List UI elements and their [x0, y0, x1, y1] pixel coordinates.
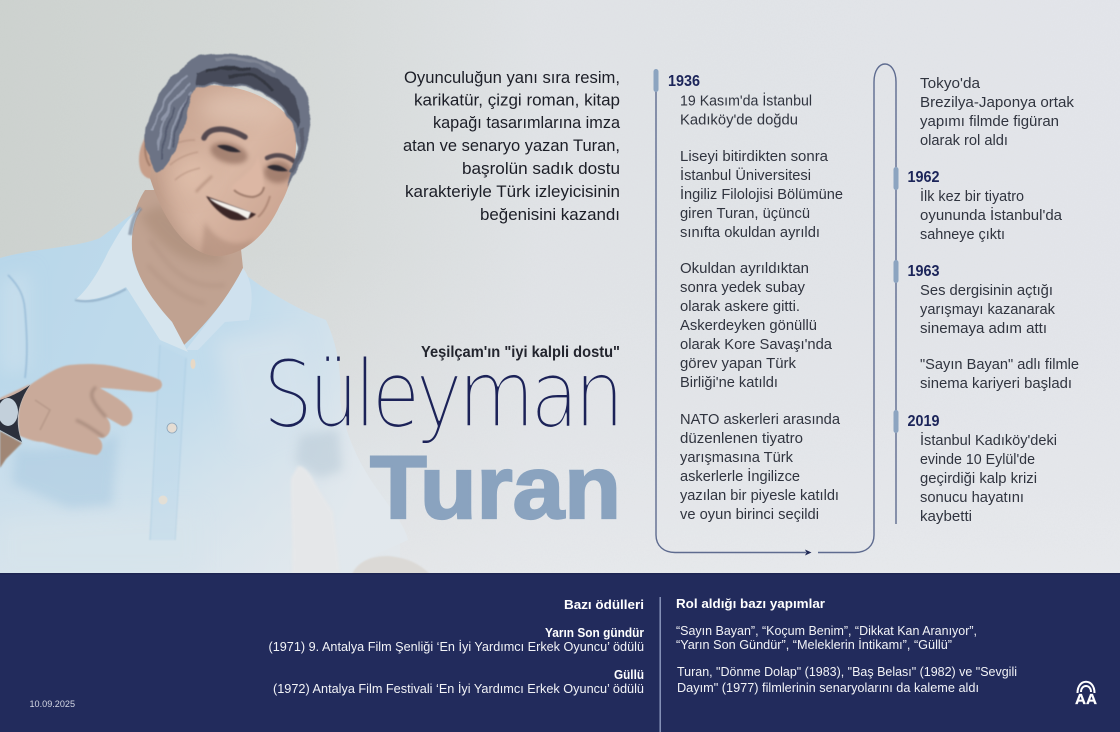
forearm [352, 556, 430, 574]
armpit gap [292, 466, 320, 532]
left collar [75, 208, 188, 352]
face [150, 85, 296, 255]
timeline markers [654, 69, 898, 433]
timeline entry: Tokyo continuation [920, 76, 1075, 149]
intro paragraph [403, 69, 621, 224]
timeline entry: 1936: NATO askerleri arasında [680, 412, 841, 428]
timeline entry: 1936: sınıfta okuldan ayrıldı [680, 225, 820, 241]
panel divider [660, 597, 661, 732]
intro paragraph: başrolün sadık dostu [462, 160, 620, 178]
eyes [217, 145, 241, 152]
teeth [209, 198, 251, 219]
right collar [186, 268, 252, 350]
wristwatch [0, 385, 30, 442]
timeline entry: 1936: İngiliz Filolojisi Bölümüne [680, 185, 843, 203]
filmography block: Turan, "Dönme Dolap" (1983), "Baş Belası" (1982) ve "Sevgili [677, 664, 1017, 679]
timeline entry: 1936: olarak Kore Savaşı'nda [680, 337, 833, 353]
timeline entry: 2019: 2019 [908, 413, 940, 430]
mouth [206, 196, 256, 220]
timeline entry: 1962: oyununda İstanbul'da [920, 206, 1063, 224]
timeline entry: 1936: 1936 [668, 73, 700, 90]
timeline entry: 2019: sonucu hayatını [920, 490, 1024, 506]
timeline entry: 1936: yarışmasına Türk [680, 450, 794, 466]
timeline entry: Tokyo continuation: olarak rol aldı [920, 133, 1008, 149]
timeline entry: 1936: Askerdeyken gönüllü [680, 318, 817, 334]
sleeve seam [8, 275, 27, 378]
timeline entry: 1962 [908, 169, 1063, 243]
title: surname: Turan [370, 437, 621, 537]
wrist [0, 431, 22, 468]
tagline: Yeşilçam'ın "iyi kalpli dostu" [421, 344, 620, 361]
timeline entry: 1963: sinema kariyeri başladı [920, 376, 1072, 392]
timeline entry: 2019: İstanbul Kadıköy'deki [920, 431, 1057, 449]
timeline entry: Tokyo continuation: Tokyo'da [920, 76, 981, 92]
awards block: Yarın Son gündür [545, 625, 644, 640]
timeline entry: 1936: olarak askere gitti. [680, 299, 800, 315]
shirt fabric shading [4, 281, 280, 402]
filmography block: “Sayın Bayan”, “Koçum Benim”, “Dikkat Kan Aranıyor”, [676, 623, 977, 638]
intro paragraph: beğenisini kazandı [480, 206, 620, 224]
awards block: Bazı ödülleri [564, 597, 644, 612]
wrist skin above watch [0, 384, 30, 400]
bottom panel [0, 573, 1120, 732]
timeline entry: 1936: yazılan bir piyesle katıldı [680, 488, 839, 504]
timeline entry: 1936: askerlerle İngilizce [680, 467, 800, 485]
timeline entry: 2019: geçirdiği kalp krizi [920, 471, 1037, 487]
timeline entry: 2019: kaybetti [920, 509, 972, 525]
intro paragraph: atan ve senaryo yazan Turan, [403, 137, 620, 155]
title: first name: Süleyman [263, 341, 620, 448]
timeline entry: Tokyo continuation: Brezilya-Japonya ortak [920, 95, 1075, 111]
timeline entry: 1962: İlk kez bir tiyatro [920, 187, 1024, 205]
awards block: (1971) 9. Antalya Film Şenliği ‘En İyi Yardımcı Erkek Oyuncu’ ödülü [268, 639, 644, 654]
timeline entry: 1963: yarışmayı kazanarak [920, 302, 1056, 318]
intro paragraph: Oyunculuğun yanı sıra resim, [404, 69, 620, 87]
timeline entry: 1963: 1963 [908, 263, 940, 280]
shirt [0, 208, 408, 574]
filmography block: “Yarın Son Gündür”, “Meleklerin İntikamı”, “Güllü” [676, 637, 952, 652]
timeline entry: 1936: düzenlenen tiyatro [680, 431, 803, 447]
timeline entry: 1936: Liseyi bitirdikten sonra [680, 149, 829, 165]
pocket [12, 433, 118, 508]
intro paragraph: karakteriyle Türk izleyicisinin [405, 183, 620, 201]
timeline entry: 1936: Kadıköy'de doğdu [680, 112, 798, 128]
ear [138, 138, 152, 180]
timeline entry: 1936 [668, 73, 843, 523]
timeline entry: 2019: evinde 10 Eylül'de [920, 452, 1035, 468]
hair [145, 54, 312, 188]
nose [247, 171, 262, 194]
buttons [158, 359, 196, 504]
timeline connector line [656, 64, 896, 552]
filmography block: Rol aldığı bazı yapımlar [676, 596, 825, 611]
awards block [268, 597, 644, 696]
timeline entry: 1963 [908, 263, 1079, 392]
awards block: Güllü [614, 667, 644, 682]
icon: AA agency logo [1075, 682, 1097, 708]
timeline entry: 1962: sahneye çıktı [920, 227, 1005, 243]
sleeve shadow [295, 430, 342, 478]
portrait photo of Süleyman Turan [0, 54, 430, 574]
timeline entry: 1962: 1962 [908, 169, 940, 186]
eyebrows [204, 129, 245, 138]
timeline entry: 2019 [908, 413, 1057, 525]
intro paragraph: karikatür, çizgi roman, kitap [414, 92, 620, 110]
timeline entry: 1936: sonra yedek subay [680, 280, 806, 296]
timeline arrowhead [805, 550, 812, 556]
timeline entry: 1936: Birliği'ne katıldı [680, 375, 778, 391]
timeline entry: 1963: Ses dergisinin açtığı [920, 283, 1053, 299]
filmography block: Dayım" (1977) filmlerinin senaryolarını da kaleme aldı [677, 680, 979, 695]
timeline entry: 1936: giren Turan, üçüncü [680, 206, 810, 222]
timeline entry: 1936: görev yapan Türk [680, 356, 797, 372]
hand with pointing finger [18, 364, 162, 455]
background wall [0, 0, 1120, 574]
timeline entry: 1936: Okuldan ayrıldıktan [680, 261, 809, 277]
neck [132, 190, 243, 345]
timeline entry: 1963: "Sayın Bayan" adlı filmle [920, 357, 1079, 373]
date: 10.09.2025 [30, 699, 75, 710]
awards block: (1972) Antalya Film Festivali ‘En İyi Yardımcı Erkek Oyuncu’ ödülü [273, 681, 644, 696]
timeline entry: 1963: sinemaya adım attı [920, 321, 1047, 337]
placket [150, 345, 186, 540]
timeline entry: 1936: ve oyun birinci seçildi [680, 507, 819, 523]
icon: AA agency logo: AA [1075, 691, 1097, 708]
timeline entry: 1936: 19 Kasım'da İstanbul [680, 92, 812, 110]
intro paragraph: kapağı tasarımlarına imza [433, 114, 621, 132]
timeline entry: Tokyo continuation: yapımı filmde figüran [920, 114, 1059, 130]
filmography block [676, 596, 1017, 695]
timeline entry: 1936: İstanbul Üniversitesi [680, 166, 811, 184]
